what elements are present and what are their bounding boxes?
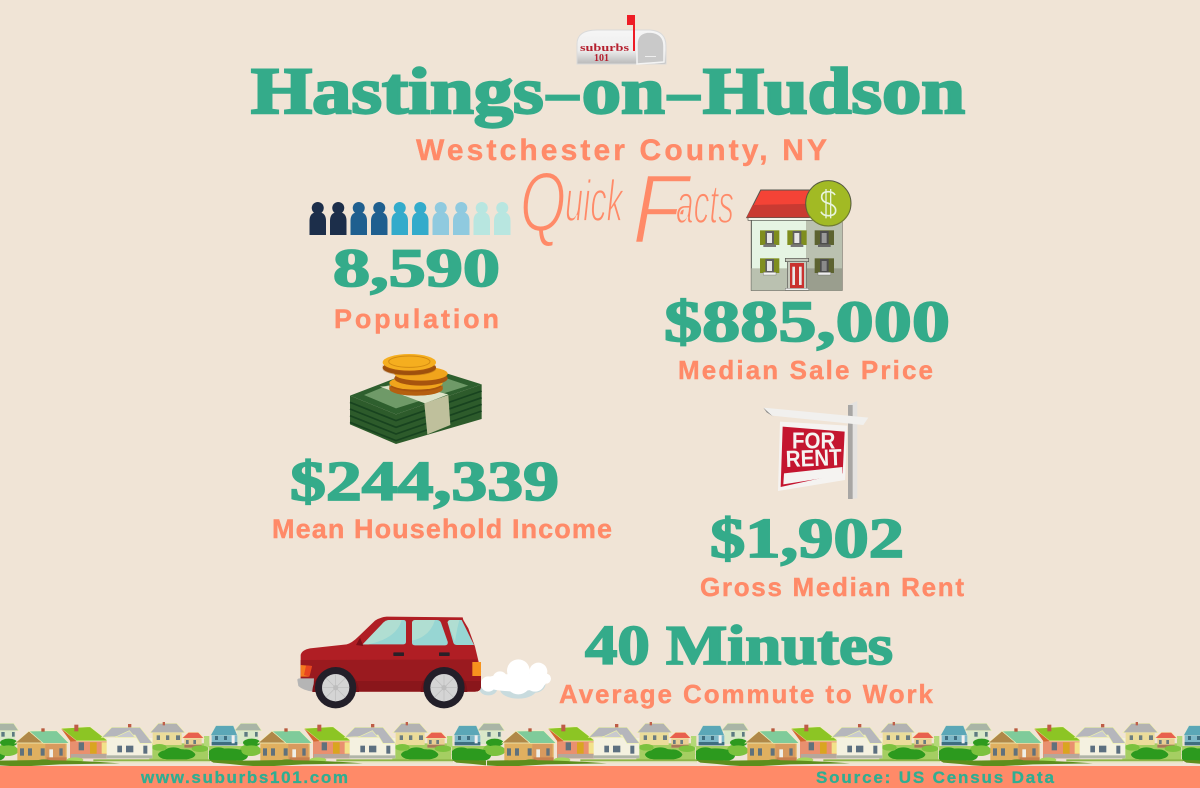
logo: mailbox: suburbs (580, 42, 630, 54)
title: Hastings (251, 55, 497, 128)
icon: population people (310, 202, 510, 235)
median sale price label: Median Sale Price (678, 355, 933, 385)
quick facts heading (520, 154, 734, 264)
title: – (546, 65, 579, 122)
title: Hudson (703, 55, 965, 128)
icon: for rent sign (763, 401, 868, 499)
median sale price value: $885,000 (664, 289, 950, 354)
quick facts heading: Q (520, 155, 566, 249)
gross median rent label: Gross Median Rent (700, 572, 964, 602)
footer website: www.suburbs101.com (140, 768, 348, 787)
icon: money stack with coins (350, 354, 482, 444)
icon: car with exhaust (297, 617, 551, 708)
commute label: Average Commute to Work (559, 679, 934, 709)
subtitle: Westchester County, NY (416, 134, 827, 167)
quick facts heading: uick (565, 169, 625, 234)
population value: 8,590 (333, 238, 500, 298)
title: on (582, 55, 665, 128)
population label: Population (334, 304, 499, 334)
gross median rent value: $1,902 (710, 508, 904, 570)
quick facts heading: F (632, 154, 693, 264)
footer source: Source: US Census Data (816, 768, 1055, 787)
footer band (0, 766, 1200, 788)
icon: for rent sign: FOR (792, 427, 835, 453)
icon: house with dollar coin (747, 181, 851, 290)
logo: mailbox (577, 15, 666, 64)
icon: for rent sign: RENT (785, 444, 842, 472)
quick facts heading: acts (676, 172, 734, 235)
house strip illustration (0, 722, 1200, 767)
mean household income label: Mean Household Income (272, 514, 612, 544)
mean household income value: $244,339 (290, 451, 559, 513)
commute value: 40 Minutes (585, 615, 893, 677)
logo: mailbox: 101 (594, 53, 609, 64)
title: – (667, 65, 700, 122)
